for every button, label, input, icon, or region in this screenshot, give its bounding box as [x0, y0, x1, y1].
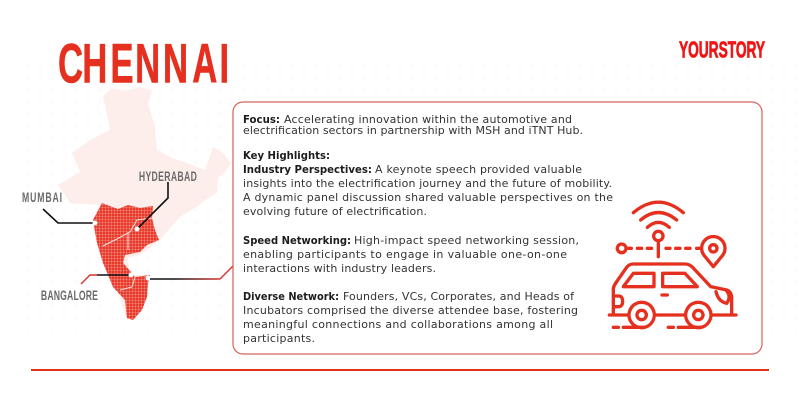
- text block: industry perspectives: insights into the electrification journey and the future of mobility.: [243, 177, 612, 190]
- icon: road dashes: [613, 322, 700, 332]
- panel: event details: [233, 102, 762, 354]
- text block: diverse network: meaningful connections and collaborations among all: [243, 318, 553, 331]
- text block: speed networking: [243, 234, 579, 275]
- text block: speed networking: Speed Networking:: [243, 234, 351, 247]
- icon: route dashes: [617, 244, 700, 253]
- icon: antenna: [654, 231, 663, 257]
- text block: focus: Focus:: [243, 113, 280, 126]
- city label: Mumbai: [22, 190, 97, 226]
- city label: Mumbai: MUMBAI: [22, 190, 62, 206]
- text block: industry perspectives: Industry Perspectives:: [243, 163, 372, 176]
- text block: diverse network: Incubators comprised the diverse attendee base, fostering: [243, 304, 578, 317]
- map: state borders: [103, 218, 152, 290]
- city label: Bangalore: BANGALORE: [41, 288, 98, 304]
- text block: industry perspectives: evolving future of electrification.: [243, 205, 427, 218]
- text block: speed networking: High-impact speed networking session,: [354, 234, 579, 247]
- city label: Hyderabad: HYDERABAD: [139, 169, 197, 185]
- map of India: [58, 87, 231, 320]
- text block: industry perspectives: A keynote speech provided valuable: [375, 163, 582, 176]
- icon: wheels: [629, 302, 711, 328]
- text block: diverse network: [243, 290, 578, 345]
- heading: key highlights: Key Highlights:: [243, 149, 330, 162]
- icon: car body: [609, 264, 736, 315]
- icon: connected car: [609, 202, 736, 328]
- map: highlighted southern states: [93, 203, 159, 320]
- text block: diverse network: Diverse Network:: [243, 290, 339, 303]
- text block: speed networking: interactions with industry leaders.: [243, 262, 436, 275]
- city label: Bangalore: [41, 272, 134, 304]
- text block: diverse network: participants.: [243, 332, 315, 345]
- connector: Chennai to panel: [146, 266, 233, 280]
- text block: speed networking: enabling participants to engage in valuable one-on-one: [243, 248, 567, 261]
- map: India base shape: [58, 87, 231, 320]
- text block: industry perspectives: A dynamic panel discussion shared valuable perspectives on the: [243, 191, 613, 204]
- city label: Hyderabad: [134, 169, 197, 232]
- text block: focus: Accelerating innovation within the automotive and: [284, 113, 572, 126]
- text block: industry perspectives: [243, 163, 613, 218]
- title: CHENNAI: [58, 32, 229, 95]
- text block: focus: [243, 113, 583, 137]
- text block: focus: electrification sectors in partnership with MSH and iTNT Hub.: [243, 124, 583, 137]
- text block: diverse network: Founders, VCs, Corporates, and Heads of: [343, 290, 575, 303]
- icon: location pin: [702, 237, 725, 267]
- icon: wifi arcs: [633, 202, 683, 227]
